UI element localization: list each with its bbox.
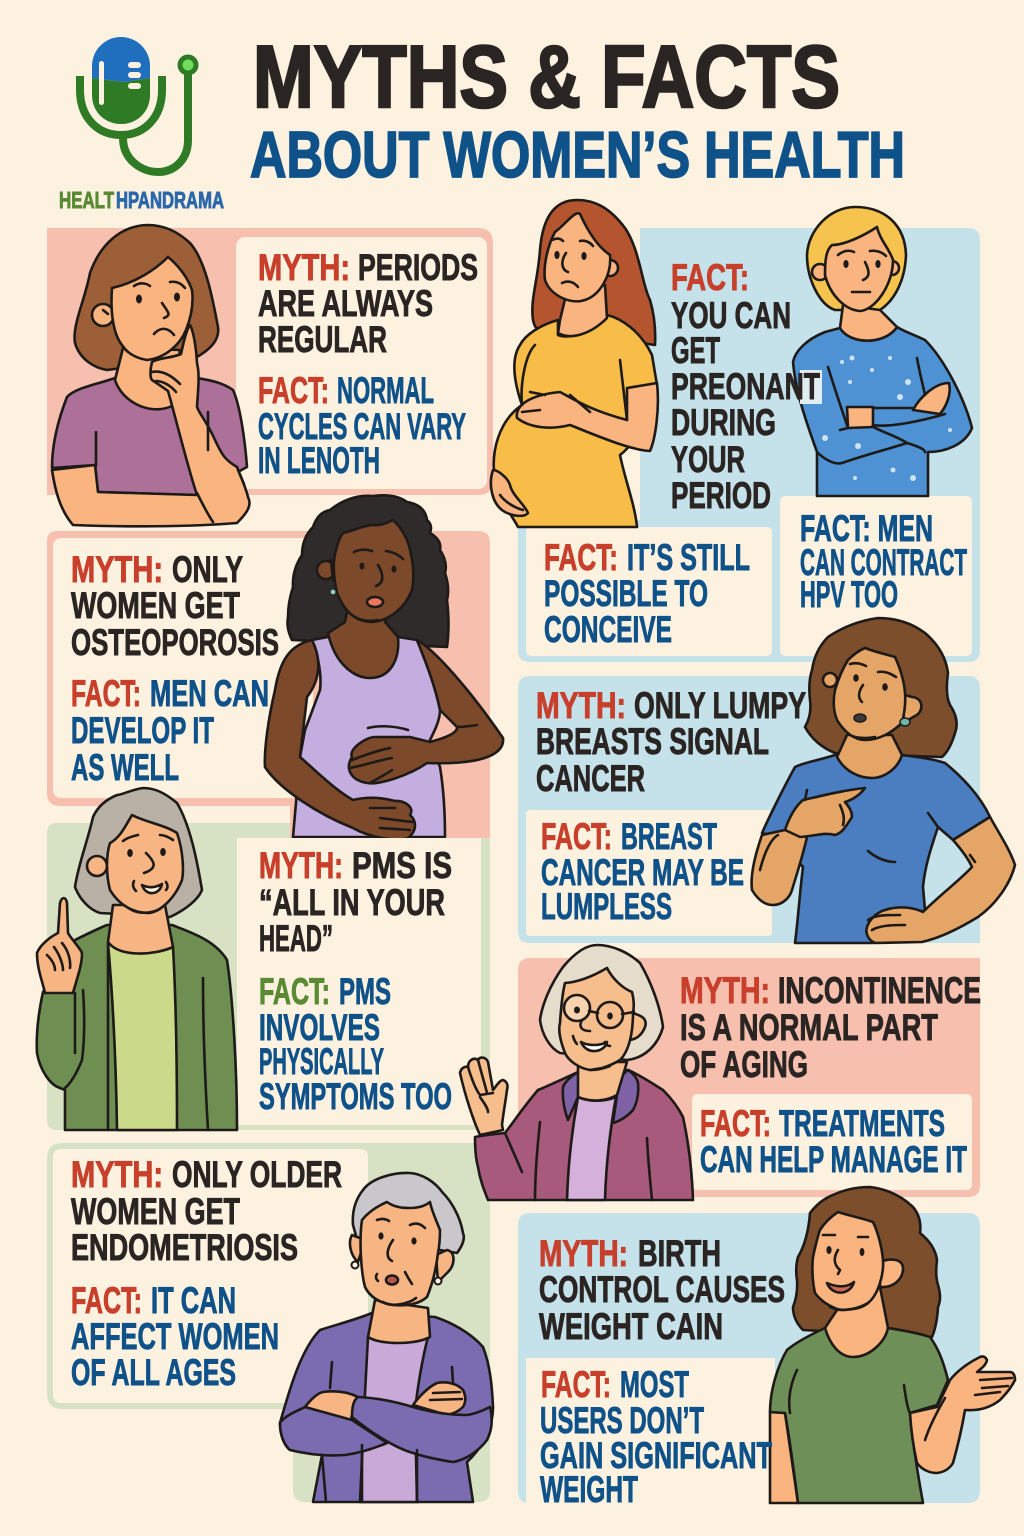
text: incontinence myth and fact: TREATMENTS: [779, 1103, 945, 1144]
panel: you can get pregnant during your period and HPV: [491, 200, 980, 662]
text: periods myth and fact: PERIODS: [358, 247, 478, 288]
text: endometriosis myth and fact: WOMEN GET: [71, 1191, 240, 1232]
text: osteoporosis myth and fact: [71, 549, 279, 788]
text: osteoporosis myth and fact: DEVELOP IT: [71, 710, 214, 751]
text: birth control myth and fact: USERS DON’T: [540, 1400, 704, 1441]
figure: pregnant woman in yellow dress: [491, 200, 658, 527]
panel: only older women get endometriosis: [47, 1143, 493, 1502]
text: pregnancy and HPV facts: IT’S STILL: [627, 537, 750, 578]
text: periods myth and fact: REGULAR: [258, 319, 387, 360]
panel: only women get osteoporosis: [47, 495, 503, 840]
text: breast cancer myth and fact: ONLY LUMPY: [634, 685, 806, 726]
text: periods myth and fact: ARE ALWAYS: [258, 283, 433, 324]
text: pregnancy and HPV facts: FACT: MEN: [800, 508, 933, 549]
text: pregnancy and HPV facts: GET: [671, 330, 720, 371]
text: pregnancy and HPV facts: FACT:: [671, 257, 749, 298]
text: pregnancy and HPV facts: [544, 257, 967, 650]
text: periods myth and fact: NORMAL: [337, 370, 434, 411]
text: pregnancy and HPV facts: POSSIBLE TO: [544, 573, 708, 614]
text: breast cancer myth and fact: [536, 685, 806, 927]
text: pregnancy and HPV facts: PERIOD: [671, 475, 771, 516]
text: endometriosis myth and fact: ENDOMETRIOSIS: [71, 1227, 298, 1268]
text: PMS myth and fact: [259, 845, 452, 1117]
figure: thinking woman in mauve top: [52, 225, 250, 526]
text: pregnancy and HPV facts: FACT:: [544, 537, 618, 578]
panel: PMS all in your head: [37, 788, 490, 1130]
figure: older woman in purple cardigan with crossed arms: [280, 1173, 493, 1502]
text: osteoporosis myth and fact: MYTH:: [71, 549, 163, 590]
logo: Healthpandrama: HPANDRAMA: [116, 187, 224, 213]
text: pregnancy and HPV facts: PREONANT: [671, 366, 820, 407]
text: PMS myth and fact: PMS: [339, 971, 391, 1012]
logo: Healthpandrama: HEALT: [59, 187, 114, 213]
figure: woman in green shirt with open hand: [770, 1187, 1015, 1503]
text: breast cancer myth and fact: BREAST: [621, 816, 717, 857]
text: incontinence myth and fact: IS A NORMAL PART: [680, 1007, 938, 1048]
text: birth control myth and fact: GAIN SIGNIFICANT: [540, 1435, 772, 1476]
panel: only lumpy breasts signal cancer: [518, 618, 1015, 943]
logo: Healthpandrama: [59, 37, 224, 213]
text: pregnancy and HPV facts: CONCEIVE: [544, 609, 672, 650]
text: periods myth and fact: MYTH:: [258, 247, 350, 288]
text: periods myth and fact: IN LENOTH: [258, 440, 380, 481]
figure: older woman in green cardigan raising a finger: [37, 788, 237, 1130]
text: incontinence myth and fact: MYTH:: [680, 970, 770, 1011]
text: breast cancer myth and fact: CANCER: [536, 758, 645, 799]
text: breast cancer myth and fact: MYTH:: [536, 685, 626, 726]
figure: blonde woman in blue top with crossed arms: [793, 207, 972, 496]
text: incontinence myth and fact: [680, 970, 981, 1180]
figure: woman with dark curly hair in lilac tank top: [265, 495, 503, 840]
text: periods myth and fact: FACT:: [258, 370, 329, 411]
text: breast cancer myth and fact: BREASTS SIGNAL: [536, 721, 769, 762]
text: pregnancy and HPV facts: HPV TOO: [800, 574, 898, 615]
text: osteoporosis myth and fact: OSTEOPOROSIS: [71, 622, 279, 663]
text: PMS myth and fact: FACT:: [259, 971, 330, 1012]
text: breast cancer myth and fact: FACT:: [541, 816, 612, 857]
panel: birth control causes weight gain: [518, 1187, 1015, 1510]
text: breast cancer myth and fact: LUMPLESS: [541, 886, 672, 927]
text: periods myth and fact: CYCLES CAN VARY: [258, 406, 466, 447]
text: osteoporosis myth and fact: FACT:: [71, 673, 141, 714]
text: PMS myth and fact: “ALL IN YOUR: [259, 882, 445, 923]
text: pregnancy and HPV facts: YOU CAN: [671, 295, 791, 336]
text: pregnancy and HPV facts: DURING: [671, 402, 776, 443]
text: PMS myth and fact: PHYSICALLY: [259, 1041, 384, 1082]
text: PMS myth and fact: MYTH:: [259, 845, 343, 886]
text: endometriosis myth and fact: [71, 1154, 342, 1393]
text: birth control myth and fact: [539, 1233, 785, 1510]
panel: incontinence is a normal part of aging: [460, 945, 981, 1200]
panel: periods are always regular: [47, 225, 493, 526]
title: [250, 27, 905, 191]
text: birth control myth and fact: BIRTH: [638, 1233, 721, 1274]
text: osteoporosis myth and fact: MEN CAN: [150, 673, 269, 714]
figure: older woman with glasses waving: [460, 945, 693, 1200]
text: osteoporosis myth and fact: WOMEN GET: [71, 585, 240, 626]
text: endometriosis myth and fact: ONLY OLDER: [172, 1154, 342, 1195]
text: incontinence myth and fact: FACT:: [700, 1103, 771, 1144]
text: osteoporosis myth and fact: AS WELL: [71, 747, 179, 788]
text: periods myth and fact: [258, 247, 478, 481]
text: endometriosis myth and fact: OF ALL AGES: [71, 1352, 236, 1393]
text: birth control myth and fact: WEIGHT: [540, 1469, 638, 1510]
text: incontinence myth and fact: OF AGING: [680, 1044, 808, 1085]
text: birth control myth and fact: FACT:: [541, 1364, 611, 1405]
text: pregnancy and HPV facts: YOUR: [671, 439, 745, 480]
text: PMS myth and fact: INVOLVES: [259, 1007, 380, 1048]
text: PMS myth and fact: HEAD”: [259, 918, 333, 959]
text: PMS myth and fact: PMS IS: [352, 845, 452, 886]
text: endometriosis myth and fact: IT CAN: [151, 1280, 236, 1321]
text: breast cancer myth and fact: CANCER MAY BE: [541, 852, 744, 893]
text: PMS myth and fact: SYMPTOMS TOO: [259, 1076, 452, 1117]
text: birth control myth and fact: WEIGHT CAIN: [539, 1306, 723, 1347]
text: endometriosis myth and fact: FACT:: [71, 1280, 142, 1321]
text: birth control myth and fact: CONTROL CAUSES: [539, 1269, 785, 1310]
title: MYTHS & FACTS: [253, 27, 840, 126]
text: birth control myth and fact: MYTH:: [539, 1233, 628, 1274]
text: osteoporosis myth and fact: ONLY: [172, 549, 243, 590]
figure: woman in blue shirt pointing at chest: [752, 618, 1015, 943]
text: endometriosis myth and fact: MYTH:: [71, 1154, 163, 1195]
text: endometriosis myth and fact: AFFECT WOMEN: [71, 1316, 279, 1357]
text: birth control myth and fact: MOST: [620, 1364, 689, 1405]
